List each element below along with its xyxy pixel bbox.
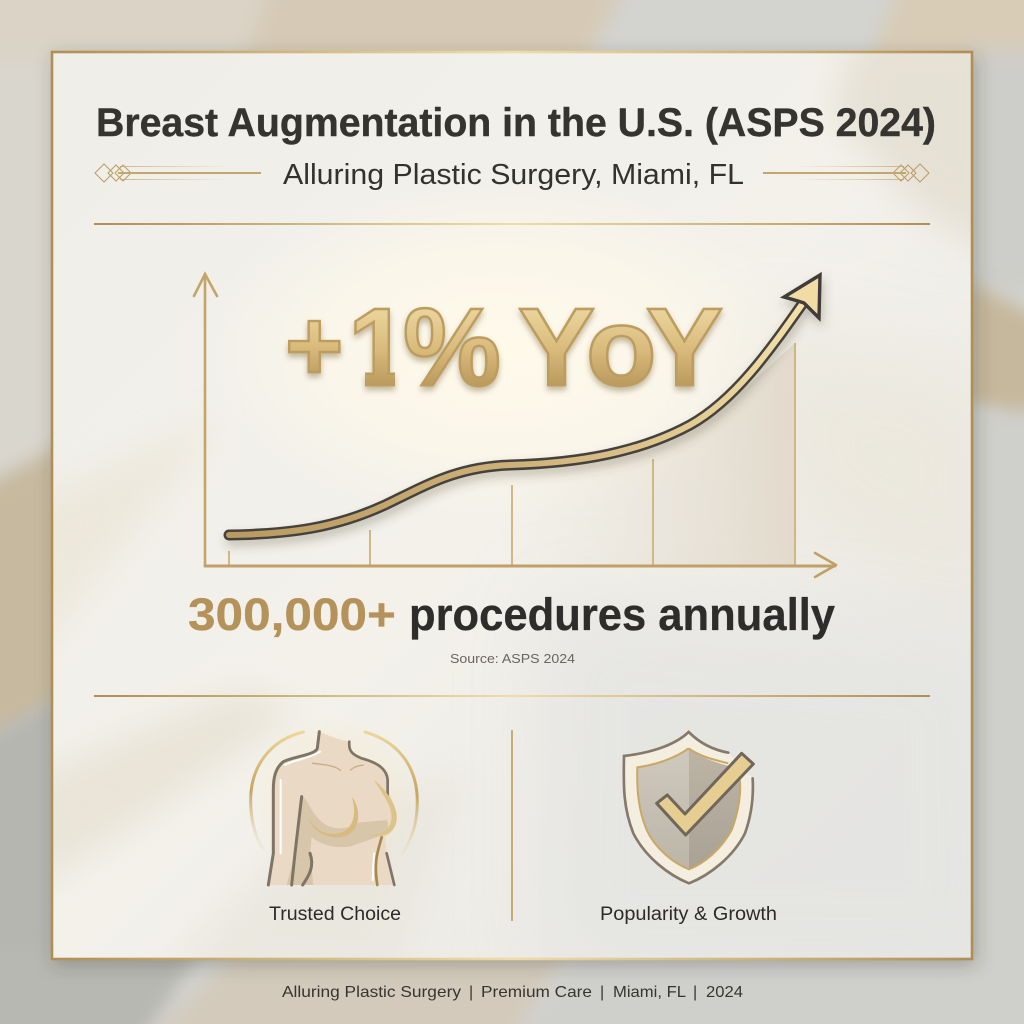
chart area fill: [500, 343, 795, 566]
footer: |: [469, 984, 473, 1001]
big value: +1% YoY: 1: [348, 286, 409, 409]
big value: +1% YoY: %: [403, 286, 501, 409]
breast highlights: [309, 797, 358, 837]
footer: |: [693, 984, 697, 1001]
footer: 2024: [706, 984, 743, 1001]
icon: torso: [251, 715, 417, 885]
footer: |: [600, 984, 604, 1001]
label: popularity and growth: Popularity & Growth: [600, 904, 777, 925]
title: Breast Augmentation in the U.S. (ASPS 2024): [96, 101, 936, 145]
growth arrow: [229, 275, 820, 535]
ornament: left of subtitle: [95, 164, 261, 182]
big value: +1% YoY: Y: [646, 286, 723, 409]
source note: Source: ASPS 2024: [450, 651, 575, 666]
big value: +1% YoY: [284, 286, 725, 409]
icon: shield with check: [624, 732, 753, 883]
halo: [251, 732, 417, 857]
check mark: [657, 753, 753, 835]
chart ticks: [229, 343, 795, 566]
torso fill: [268, 732, 397, 885]
footer: Miami, FL: [613, 984, 686, 1001]
subtitle: Alluring Plastic Surgery, Miami, FL: [283, 159, 744, 191]
stat line: 300,000+: [188, 589, 396, 640]
stat line: procedures annually: [409, 589, 835, 640]
shading: [287, 796, 388, 885]
y axis: [194, 274, 217, 566]
x axis: [205, 553, 836, 577]
footer: Premium Care: [481, 984, 592, 1001]
footer: Alluring Plastic Surgery: [282, 984, 461, 1001]
label: trusted choice: Trusted Choice: [269, 904, 401, 925]
ornament: right of subtitle: [763, 164, 929, 182]
big value: +1% YoY: o: [586, 286, 657, 409]
big value: +1% YoY: Y: [518, 286, 595, 409]
big value: +1% YoY: +: [285, 290, 343, 402]
chart: growth curve: [194, 274, 836, 577]
